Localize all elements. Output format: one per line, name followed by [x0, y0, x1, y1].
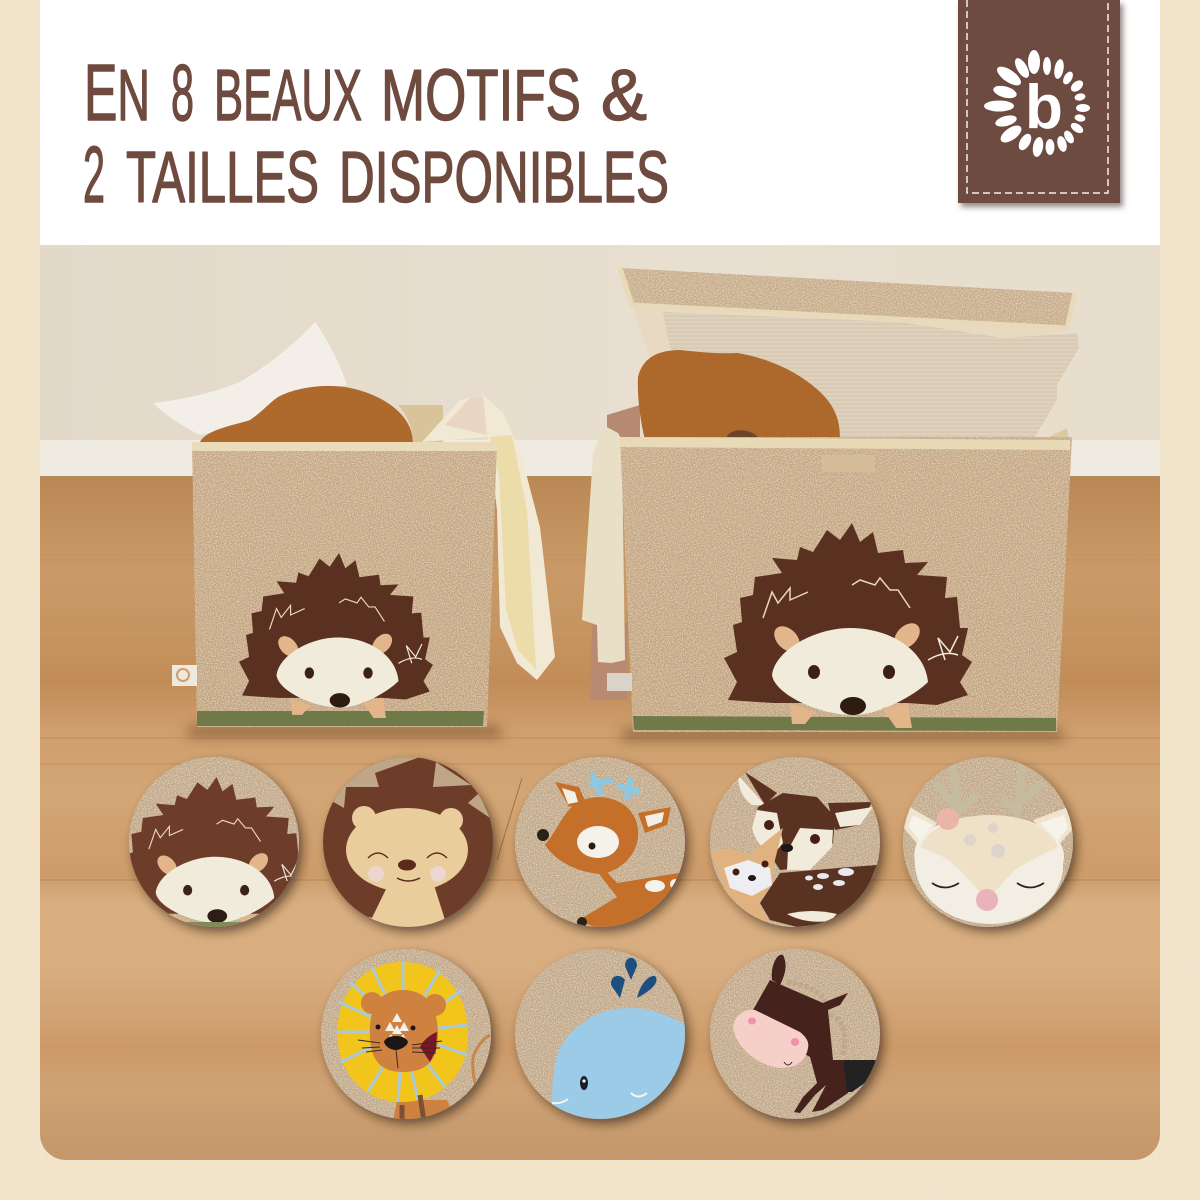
small box [153, 322, 555, 738]
icon: flower logo: b [1025, 73, 1063, 142]
hedgehog small [239, 553, 433, 718]
box rim [192, 442, 498, 451]
large box [582, 268, 1079, 741]
plush hole [726, 430, 758, 437]
inner back panel [398, 405, 443, 442]
wooden floor [40, 476, 1160, 1166]
title: DISPONIBLES [339, 138, 669, 218]
box front [620, 437, 1072, 732]
knit blanket [422, 395, 555, 680]
motif 8: horse [710, 949, 880, 1119]
green trim [197, 711, 484, 726]
baseboard [40, 440, 1160, 477]
title: 8 [171, 48, 194, 137]
title: EN [84, 48, 150, 137]
title: & [601, 56, 647, 136]
motif 7: whale [515, 949, 690, 1125]
side cloth [1056, 398, 1057, 402]
box rim [620, 437, 1070, 450]
knit blanket [582, 405, 640, 700]
lid interior [632, 305, 1067, 358]
motif 3: orange fawn [515, 757, 685, 927]
handle patch [822, 455, 875, 472]
motif 4: deer and fawn [710, 757, 880, 927]
small tag [172, 665, 197, 686]
title: MOTIFS [381, 56, 581, 136]
white pillow [153, 322, 347, 435]
green trim [633, 716, 1056, 731]
box front [192, 443, 497, 727]
wall [40, 245, 1160, 445]
title [83, 48, 669, 219]
motif 1: hedgehog [119, 757, 308, 933]
title: BEAUX [214, 56, 362, 136]
photo scene [40, 245, 1160, 1166]
motif 6: lion [321, 949, 491, 1125]
box ground shadow [186, 725, 503, 738]
box lid [620, 268, 1075, 328]
small tag [607, 673, 632, 691]
box ground shadow [620, 728, 1066, 741]
title: 2 [83, 130, 105, 219]
title: TAILLES [126, 138, 319, 218]
logo tag [958, 0, 1120, 203]
hedgehog large [724, 523, 972, 728]
icon: flower logo [984, 50, 1090, 158]
pillow [663, 312, 1079, 440]
brown plush [200, 386, 413, 442]
inner corner [1049, 428, 1068, 437]
motif 2: bear hedgehog [323, 750, 493, 935]
white header panel [40, 0, 1160, 245]
motif 5: pale deer [903, 757, 1073, 927]
brown plush [638, 350, 840, 440]
